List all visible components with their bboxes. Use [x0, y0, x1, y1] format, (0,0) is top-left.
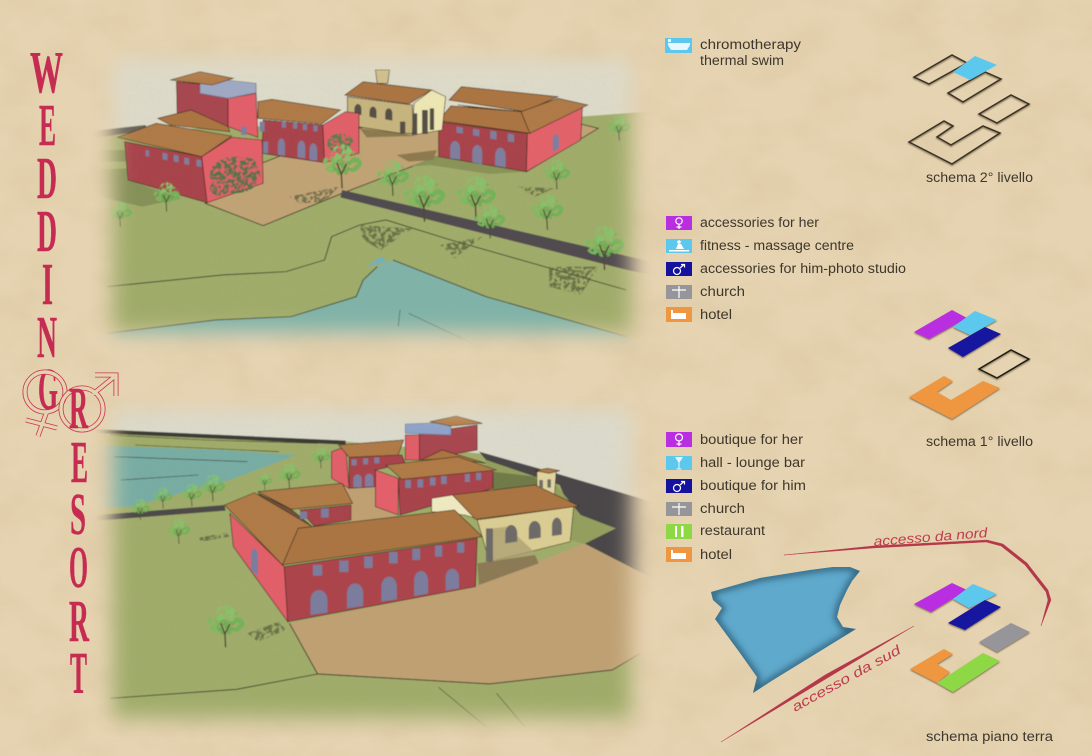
- right building windows: [450, 127, 559, 168]
- terrain lines: [107, 220, 626, 343]
- legend text: [700, 37, 801, 68]
- title: WEDDING RESORT: T: [70, 640, 87, 706]
- back road: [98, 124, 146, 136]
- icon: venus purple: [666, 216, 692, 230]
- right building: [439, 87, 588, 172]
- cyan footprint: [953, 56, 997, 80]
- road: north access: [784, 540, 1051, 626]
- church shaded base: [493, 527, 535, 562]
- icon: mars navy: [666, 262, 692, 276]
- icon: hotel bed: [666, 547, 692, 562]
- label: north access: accesso da nord: [873, 525, 988, 549]
- plaza: [289, 543, 668, 684]
- caption: schema 2° livello: [926, 170, 1033, 185]
- legend text: boutique for him: [700, 478, 806, 493]
- caption: schema 1° livello: [926, 434, 1033, 449]
- left rear windows: [352, 457, 379, 487]
- plaza shadows: [360, 128, 437, 162]
- tree shadows: [195, 533, 286, 642]
- letters WEDDING: E: [39, 92, 56, 158]
- lawn shadows: [108, 150, 180, 207]
- legend text: accessories for him-photo studio: [700, 261, 906, 276]
- legend text: [700, 215, 906, 322]
- plaza: [205, 117, 598, 226]
- right lawn: [486, 460, 616, 544]
- mid roofs and left building: [118, 110, 263, 203]
- letters WEDDING: [30, 39, 63, 422]
- icon: church cross: [666, 502, 692, 516]
- main L building: [225, 483, 482, 622]
- letters WEDDING: N: [37, 304, 57, 370]
- left building ivy: [209, 157, 260, 196]
- middle building: [258, 99, 359, 163]
- schema: first level: [909, 310, 1033, 449]
- right road: [478, 451, 646, 573]
- title: WEDDING RESORT: O: [69, 534, 88, 600]
- title: WEDDING RESORT: [25, 39, 116, 706]
- letters WEDDING: I: [42, 251, 53, 317]
- panel: rendering of ground level view: [97, 404, 646, 730]
- sky: [106, 402, 638, 497]
- legend text: hall - lounge bar: [700, 455, 806, 470]
- church: [432, 468, 579, 562]
- lake: [711, 567, 860, 693]
- far trees: [131, 447, 331, 647]
- paint grain: [86, 393, 668, 737]
- legend text: chromotherapy: [700, 37, 801, 52]
- letters RESORT: S: [70, 481, 86, 547]
- icon: restaurant cutlery: [666, 524, 692, 539]
- lake: [86, 445, 297, 508]
- footprint outlines: [909, 55, 1029, 164]
- front lawn: [409, 156, 526, 174]
- back road line: [86, 429, 346, 445]
- icon: mars navy: [666, 479, 692, 493]
- middle building: [375, 450, 497, 515]
- terrain shadows: [289, 187, 598, 295]
- letters RESORT: [69, 375, 90, 706]
- letters WEDDING: W: [30, 39, 63, 105]
- legend text: thermal swim: [700, 53, 784, 68]
- legend text: church: [700, 284, 745, 299]
- church windows and pier: [486, 479, 562, 562]
- grass field: [100, 112, 644, 338]
- church: [345, 70, 446, 135]
- legend text: hotel: [700, 307, 732, 322]
- middle building windows: [405, 473, 481, 488]
- mars symbol: [61, 375, 116, 430]
- title: WEDDING RESORT: R: [69, 588, 90, 654]
- road: south access: [721, 626, 914, 742]
- title: WEDDING RESORT: R: [69, 375, 89, 441]
- icon: thermal swim: [665, 38, 692, 53]
- lake sliver: [366, 257, 388, 267]
- left rear building: [332, 440, 405, 488]
- legend text: fitness - massage centre: [700, 238, 854, 253]
- schema: second level: [909, 55, 1033, 185]
- sky: [106, 52, 638, 130]
- icon: church cross: [666, 285, 692, 299]
- court tan: [346, 487, 395, 522]
- panel: rendering of upper level view: [98, 54, 646, 346]
- icon: massage: [666, 239, 692, 253]
- tower: [405, 416, 482, 460]
- title: WEDDING RESORT: E: [71, 429, 88, 495]
- letters WEDDING: D: [37, 198, 57, 264]
- letters WEDDING: D: [37, 145, 57, 211]
- legend text: hotel: [700, 547, 732, 562]
- legend: first level: [666, 215, 906, 322]
- grass field: [86, 430, 668, 737]
- ivy on middle building: [327, 133, 354, 153]
- label: south access: accesso da sud: [789, 642, 904, 715]
- venus symbol: [25, 372, 65, 436]
- legend: second level: [665, 37, 801, 68]
- lake lines: [111, 435, 318, 480]
- site plan: ground level: [711, 525, 1054, 744]
- caption: schema piano terra: [926, 729, 1054, 744]
- icon: cocktail glass: [666, 456, 692, 470]
- footprints: [910, 583, 1030, 692]
- gender symbols: [25, 372, 116, 436]
- legend: ground level: [666, 432, 806, 562]
- church openings: [354, 104, 434, 135]
- left building windows: [146, 150, 201, 167]
- icon: hotel bed: [666, 307, 692, 322]
- tower: [170, 72, 258, 137]
- paint grain: [86, 40, 668, 360]
- lake: [109, 260, 630, 343]
- middle building windows: [241, 122, 318, 161]
- legend text: church: [700, 501, 745, 516]
- letters WEDDING: G: [38, 356, 58, 422]
- icon: venus purple: [666, 432, 692, 447]
- legend text: restaurant: [700, 523, 765, 538]
- terrain lines: [111, 623, 640, 727]
- trees: [109, 115, 631, 270]
- legend text: boutique for her: [700, 432, 804, 447]
- shaded lawn patch: [493, 472, 539, 490]
- left road: [100, 504, 226, 520]
- footprints: [909, 310, 1029, 419]
- main building windows: [251, 508, 464, 615]
- legend text: [700, 432, 806, 562]
- plaza shadow: [477, 555, 539, 585]
- diagonal road: [340, 190, 644, 272]
- legend text: accessories for her: [700, 215, 820, 230]
